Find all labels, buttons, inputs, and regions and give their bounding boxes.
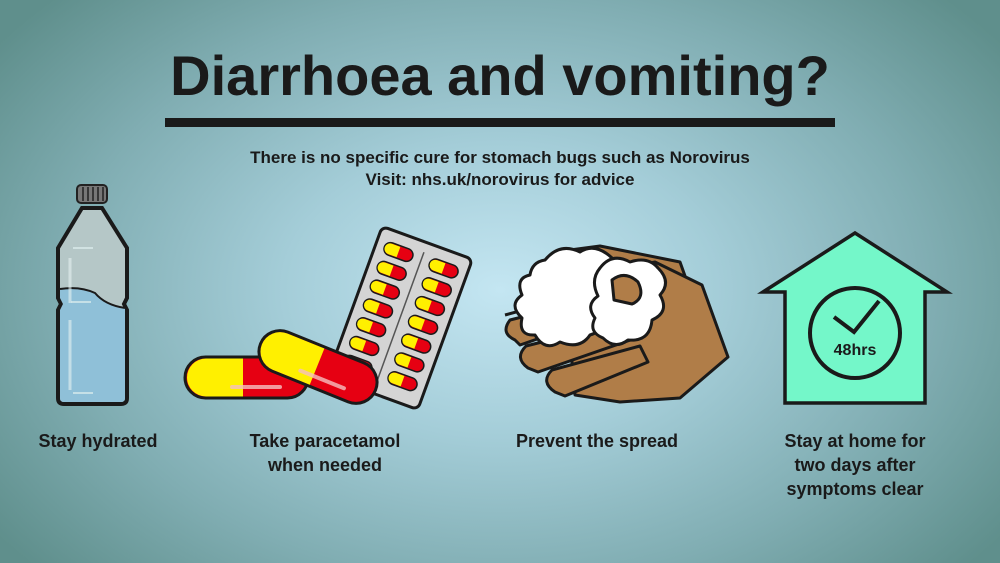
label: stay at home: two days after [794, 455, 916, 475]
icon: house with clock: 48hrs [834, 342, 876, 359]
label: prevent the spread: Prevent the spread [516, 431, 678, 451]
label: stay at home: Stay at home for [784, 431, 926, 451]
label: stay at home: symptoms clear [786, 479, 924, 499]
label: stay hydrated: Stay hydrated [38, 431, 158, 451]
subtitle [250, 148, 750, 189]
title underline [165, 118, 835, 127]
label: take paracetamol: Take paracetamol [250, 431, 400, 451]
label: stay at home [784, 431, 926, 499]
label: take paracetamol: when needed [268, 455, 382, 475]
subtitle: Visit: nhs.uk/norovirus for advice [366, 170, 634, 189]
title: Diarrhoea and vomiting? [170, 44, 830, 107]
label: take paracetamol [250, 431, 400, 475]
subtitle: There is no specific cure for stomach bugs such as Norovirus [250, 148, 750, 167]
